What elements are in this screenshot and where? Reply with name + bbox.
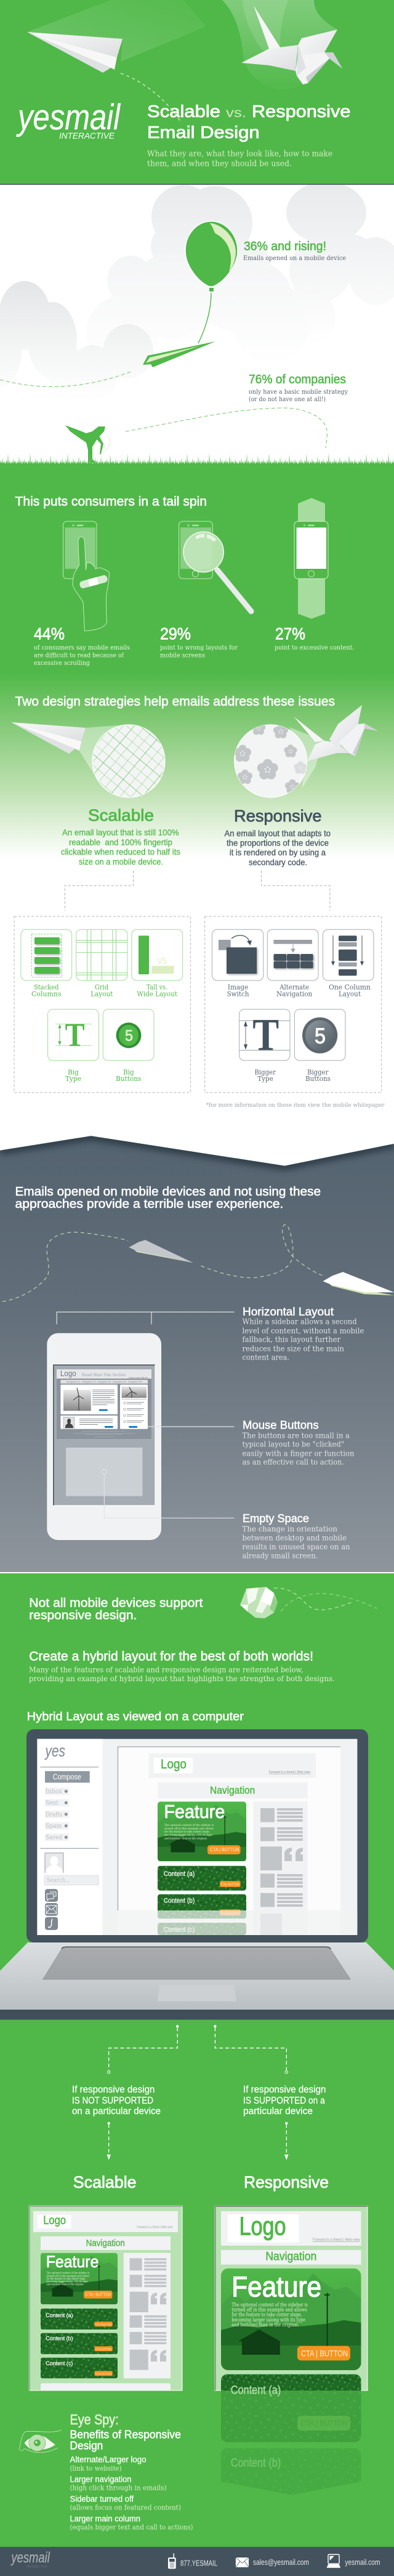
icon: origami crane (241, 6, 342, 84)
responsive header: Logo (239, 2212, 286, 2241)
email header (149, 1753, 316, 1778)
text: supported (243, 2085, 326, 2117)
footnote: *for more information on these item view the mobile whitepaper (206, 1102, 385, 1109)
panel: responsive description: the proportions of the device (227, 838, 329, 848)
stat: 27 percent: point to excessive content. (275, 644, 355, 651)
feature card: Feature (164, 1801, 225, 1822)
content b card: Content (b) (164, 1897, 195, 1904)
tile: grid layout (76, 929, 127, 998)
webmail sidebar (37, 1739, 102, 1935)
desktop email shown on phone: Forward to a friend | Web view (129, 1377, 148, 1379)
webmail sidebar: Inbox (46, 1788, 62, 1795)
panel: scalable description: clickable when reduced to half its (61, 847, 180, 857)
text: not supported: If responsive design (72, 2085, 155, 2095)
dashed flight path (121, 73, 182, 123)
heading: tail spin: This puts consumers in a tail spin (15, 495, 207, 509)
text: not supported: IS NOT SUPPORTED (72, 2095, 153, 2106)
stat: 29 percent: point to wrong layouts for (160, 644, 238, 651)
heading: two design strategies: Two design strategies help emails address these issues (15, 695, 335, 709)
scalable content a: CTA | BUTTON (95, 2323, 111, 2326)
benefit list: Larger main column (70, 2514, 140, 2524)
stat: 76 percent: only have a basic mobile strategy (249, 388, 348, 396)
scalable content a: Content (a) (46, 2312, 73, 2319)
logo: yesmail (16, 97, 121, 137)
panel: responsive description: Responsive (234, 807, 321, 825)
arrow: to responsive (284, 2122, 289, 2160)
responsive feature: becoming larger (along with its type (231, 2317, 305, 2323)
icon: envelope (236, 2558, 249, 2567)
tile: alternate navigation (267, 929, 318, 998)
stat: 44 percent (34, 625, 130, 667)
feature card: becoming larger (along with its type (164, 1833, 212, 1837)
panel: eye spy benefits: Eye Spy: (70, 2411, 119, 2427)
connector: scalable to box (65, 871, 134, 911)
heading: not all devices: Not all mobile devices support (29, 1596, 203, 1610)
content a card: Content (a) (164, 1870, 195, 1878)
tile: stacked columns: Stacked (34, 983, 59, 992)
email navigation (158, 1782, 308, 1798)
tile: alternate navigation: Alternate (279, 983, 309, 992)
icon: phone (168, 2553, 176, 2569)
email sidebar column (253, 1801, 308, 1935)
dashed flight path right (126, 408, 327, 448)
callout: empty space: The change in orientation (243, 1525, 337, 1533)
title: vs. (226, 106, 246, 120)
responsive header (221, 2211, 361, 2246)
tile: grid layout: Layout (90, 990, 113, 998)
icon: phone with long scroll band (294, 498, 328, 619)
title: Email Design (147, 123, 260, 142)
webmail sidebar: Compose (53, 1773, 81, 1782)
feature card: The optional content of the sidebar is (164, 1824, 214, 1827)
panel: responsive description: it is rendered on by using a (230, 847, 326, 857)
tile: bigger type: Bigger (255, 1067, 276, 1076)
panel: footer (0, 2547, 394, 2576)
bandage (79, 574, 108, 589)
stat: 36 percent: 36% and rising! (244, 240, 326, 253)
panel: scalable description (61, 806, 180, 866)
fade at screen bottom (102, 1910, 357, 1935)
tile: big buttons: 5 (125, 1027, 133, 1045)
benefit list: (allows focus on featured content) (70, 2503, 181, 2511)
benefit list: (link to website) (70, 2464, 122, 2472)
heading: hybrid layout (29, 1649, 335, 1683)
benefit list: Larger navigation (70, 2475, 132, 2484)
panel: header band (0, 0, 394, 185)
tile: tall vs wide: Wide Layout (137, 990, 177, 998)
connector: supported (214, 2025, 287, 2073)
icon: paper plane (27, 32, 123, 73)
responsive feature: Feature (231, 2271, 321, 2303)
icon: phone with magnifier (179, 521, 251, 611)
dashed flight path left (0, 372, 131, 386)
heading: terrible experience: Emails opened on mobile devices and not using these (15, 1185, 321, 1199)
scalable navigation: Navigation (86, 2238, 125, 2248)
heading: as viewed on computer: Hybrid Layout as viewed on a computer (27, 1711, 244, 1724)
stat: 76 percent: (or do not have one at all!) (249, 396, 326, 403)
content c card (158, 1923, 246, 1935)
feature card (158, 1801, 246, 1861)
stat: 44 percent: are difficult to read because of (34, 652, 124, 659)
tile: bigger type: T (252, 1010, 279, 1061)
responsive feature: CTA | BUTTON (301, 2348, 348, 2358)
scalable feature: CTA | BUTTON (86, 2292, 111, 2297)
feature card: for the feature to take center stage, (164, 1830, 210, 1834)
tile: big buttons: Big (123, 1067, 134, 1076)
subtitle: them, and when they should be used. (147, 160, 292, 169)
heading: terrible experience (15, 1185, 321, 1211)
dashed flight path looping (2, 1232, 128, 1302)
tile: one column layout (323, 929, 374, 998)
panel: scalable description: Scalable (88, 806, 154, 825)
tile: bigger buttons (294, 1009, 345, 1083)
email header: Logo (161, 1757, 187, 1771)
panel: scalable description: readable and 100% fingertip (69, 838, 172, 847)
footer logo: INTERACTIVE (26, 2566, 47, 2569)
panel: responsive description (224, 807, 331, 867)
scalable feature: and buttons) than in the original. (47, 2283, 84, 2286)
responsive content a (221, 2374, 361, 2442)
stat: 36 percent (243, 240, 346, 262)
callout: mouse buttons: easily with a finger or function (243, 1449, 355, 1457)
figure: person throwing plane (65, 425, 110, 463)
responsive content b (221, 2448, 361, 2495)
responsive content b: Content (b) (231, 2457, 281, 2470)
callout: mouse buttons: Mouse Buttons (243, 1419, 319, 1431)
tile: image switch: Switch (227, 990, 249, 998)
tile: tall vs wide: Tall vs. (147, 983, 167, 992)
illustration: responsive crane and lens (234, 705, 378, 797)
content c card: Content (c) (164, 1926, 195, 1934)
tile: image switch (212, 929, 263, 998)
stat: 44 percent: 44% (34, 625, 65, 643)
panel: green section 2 (0, 463, 394, 858)
webmail sidebar: yes (44, 1742, 65, 1760)
panel: eye spy benefits: Design (70, 2439, 103, 2452)
scalable content b: CTA | BUTTON (95, 2347, 111, 2351)
stat: 76 percent (249, 373, 348, 403)
tile: stacked columns: Columns (31, 990, 62, 998)
clouds (0, 182, 394, 419)
heading: hybrid layout: providing an example of hybrid layout that highlights the strengths of both designs. (29, 1674, 335, 1683)
scalable content c: Content (c) (46, 2360, 73, 2367)
responsive feature: and buttons) than in the original. (231, 2321, 299, 2328)
email navigation: Navigation (210, 1785, 255, 1796)
stat: 29 percent: 29% (160, 625, 191, 643)
stat: 27 percent (275, 625, 355, 651)
tile: bigger type (239, 1009, 290, 1083)
panel: white sky section (0, 184, 394, 465)
tile: one column layout: One Column (329, 983, 371, 992)
tile: tall vs wide (132, 929, 183, 998)
tile: bigger buttons: 5 (315, 1024, 326, 1048)
callout: empty space: already small screen. (243, 1551, 318, 1560)
responsive navigation (221, 2250, 361, 2265)
icon: laptop (327, 2554, 340, 2568)
responsive content a: Content (a) (231, 2384, 281, 2397)
desktop email shown on phone: Navigation #1 Navigation #2 Navigation #3 Navigation #4 Navigation #5 (66, 1380, 142, 1383)
tile: bigger type: Type (257, 1074, 273, 1083)
responsive feature (221, 2268, 361, 2370)
callout: mouse buttons (243, 1419, 355, 1467)
scalable sidebar (124, 2253, 171, 2378)
scalable feature: turned off in this example and allows (47, 2275, 89, 2278)
tile: image switch: Image (228, 983, 248, 992)
scalable feature (41, 2252, 118, 2304)
device: laptop (0, 1729, 394, 2020)
scalable content a (41, 2309, 118, 2329)
subtitle: What they are, what they look like, how to make (147, 149, 332, 158)
connector: not supported (107, 2025, 179, 2073)
connector: responsive to box (261, 871, 330, 911)
text: not supported (72, 2085, 161, 2117)
dashed trail from paper ball (274, 1588, 377, 1612)
content a card (158, 1866, 246, 1891)
callout: horizontal layout: level of content, without a mobile (243, 1326, 364, 1335)
scalable feature: for the feature to take center stage, (47, 2278, 86, 2281)
scalable feature: becoming larger (along with its type (47, 2280, 88, 2283)
text: supported: IS SUPPORTED on a (243, 2095, 325, 2106)
icon: grey plane (129, 1240, 193, 1263)
benefit list: (high click through in emails) (70, 2484, 167, 2492)
desktop email shown on phone: Email Main Title Section (82, 1372, 126, 1377)
scalable content c: CTA | BUTTON (95, 2372, 111, 2376)
footer logo: yesmail (10, 2550, 50, 2566)
title (147, 102, 350, 142)
text: not supported: on a particular device (72, 2106, 161, 2117)
callout: empty space: Empty Space (243, 1512, 309, 1525)
stat: 44 percent: excessive scrolling (34, 659, 90, 667)
contact: email: sales@yesmail.com (253, 2558, 309, 2567)
tile: big type: Big (68, 1067, 79, 1076)
heading: not all devices (29, 1596, 203, 1623)
callout: horizontal layout: While a sidebar allows a second (243, 1318, 357, 1326)
subtitle (147, 149, 332, 169)
heading: responsive: Responsive (244, 2173, 329, 2191)
scalable feature: The optional content of the sidebar is (47, 2272, 90, 2275)
responsive content a: CTA | BUTTON (301, 2418, 348, 2428)
email on desktop (102, 1747, 357, 1935)
webmail sidebar: Drafts (46, 1811, 62, 1818)
scalable navigation (41, 2236, 171, 2250)
callout: empty space: results in unused space on an (243, 1543, 350, 1551)
title: Responsive (252, 102, 350, 121)
plane trail (27, 0, 206, 62)
icon: crumpled paper ball (240, 1587, 278, 1618)
callout lines (57, 1312, 234, 1518)
footer logo (10, 2550, 50, 2569)
callout: horizontal layout: reduces the size of the main (243, 1344, 344, 1353)
tile: big type: T (65, 1016, 85, 1053)
feature card: and buttons) than in the original. (164, 1836, 207, 1840)
feature card: CTA | BUTTON (210, 1846, 239, 1853)
scalable header: Forward to a friend | Web view (137, 2226, 173, 2230)
contact: website: yesmail.com (345, 2558, 380, 2567)
feature card: turned off in this example and allows (164, 1827, 214, 1830)
contact: phone number: 877.YESMAIL (180, 2559, 217, 2567)
stat: 27 percent: 27% (275, 625, 305, 643)
content a card: CTA | BUTTON (221, 1883, 239, 1887)
panel: scalable description: size on a mobile device. (79, 857, 163, 866)
benefit list: (equals bigger text and call to actions) (70, 2523, 193, 2531)
panel: eye spy benefits: Benefits of Responsive (70, 2429, 181, 2441)
stat: 36 percent: Emails opened on a mobile device (243, 255, 346, 262)
text: supported: If responsive design (243, 2085, 326, 2095)
tile: big type: Type (65, 1074, 81, 1083)
panel: dark section (0, 1136, 394, 2576)
icon: eye (19, 2430, 62, 2453)
title: Scalable (147, 102, 220, 121)
callout: horizontal layout: fallback, this layout further (243, 1335, 340, 1344)
empty space box (66, 1448, 142, 1496)
stat: 29 percent: mobile screens (160, 652, 205, 659)
webmail sidebar: Sent (46, 1800, 58, 1807)
panel: scalable description: An email layout that is still 100% (62, 828, 179, 838)
grass (0, 450, 394, 463)
panel: scalable techniques (14, 916, 190, 1093)
desktop email shown on phone: Logo (60, 1369, 76, 1378)
laptop base (0, 1942, 394, 2020)
callout: horizontal layout: content area. (243, 1353, 289, 1362)
crane trail (222, 0, 337, 89)
tile: big buttons (103, 1009, 154, 1083)
panel: scalable email mockup (29, 2206, 182, 2391)
scalable content b: Content (b) (46, 2335, 73, 2342)
tile: one column layout: Layout (339, 990, 361, 998)
webmail sidebar: Search... (47, 1877, 70, 1884)
responsive header: Forward to a friend | Web view (313, 2238, 360, 2242)
scalable content c (41, 2358, 118, 2378)
logo: INTERACTIVE (59, 131, 115, 141)
panel: responsive email mockup (215, 2206, 368, 2495)
stat: 29 percent (160, 625, 238, 659)
webmail sidebar: Spam (46, 1822, 62, 1830)
tile: alternate navigation: Navigation (276, 990, 313, 998)
heading: hybrid layout: Create a hybrid layout for the best of both worlds! (29, 1649, 313, 1663)
benefit list: Alternate/Larger logo (70, 2455, 147, 2464)
callout: empty space (243, 1512, 350, 1560)
tile: big type (48, 1009, 98, 1083)
illustration: scalable plane and lens (11, 722, 165, 797)
scalable header: Logo (43, 2214, 66, 2227)
desktop email shown on phone (57, 1369, 151, 1439)
callout: mouse buttons: The buttons are too small in a (243, 1431, 350, 1440)
heading: scalable: Scalable (73, 2173, 137, 2191)
panel: responsive description: An email layout that adapts to (224, 828, 331, 838)
arrow: to scalable (107, 2122, 111, 2160)
icon: phone with injured finger (63, 521, 110, 631)
scalable content b (41, 2333, 118, 2354)
callout: horizontal layout (243, 1305, 364, 1362)
responsive feature: for the feature to take center stage, (231, 2312, 302, 2318)
heading: not all devices: responsive design. (29, 1609, 137, 1623)
scalable feature: Feature (46, 2252, 98, 2271)
callout: mouse buttons: as an effective call to action. (243, 1458, 344, 1467)
text: supported: particular device (243, 2106, 313, 2117)
tile: bigger buttons: Bigger (307, 1067, 329, 1076)
tile: stacked columns (21, 929, 72, 998)
webmail sidebar: Saved (46, 1834, 62, 1841)
panel: responsive techniques (205, 916, 382, 1093)
responsive navigation: Navigation (265, 2251, 316, 2264)
icon: white plane (323, 1272, 394, 1295)
device: phone mockup (47, 1333, 161, 1540)
callout: mouse buttons: typical layout to be "clicked" (243, 1440, 344, 1449)
heading: hybrid layout: Many of the features of scalable and responsive design are reiterated below, (29, 1665, 304, 1674)
benefit list: Sidebar turned off (70, 2495, 134, 2504)
tile: bigger buttons: Buttons (305, 1074, 331, 1083)
responsive feature: turned off in this example and allows (231, 2307, 307, 2313)
tile: grid layout: Grid (95, 983, 109, 992)
icon: balloon (185, 221, 238, 343)
tile: tall vs wide: VS (158, 956, 167, 966)
content b card (158, 1894, 246, 1918)
responsive feature: The optional content of the sidebar is (231, 2302, 308, 2308)
callout: empty space: between desktop and mobile (243, 1533, 347, 1542)
tile: big buttons: Buttons (116, 1074, 141, 1083)
stat: 76 percent: 76% of companies (249, 373, 346, 386)
stat: 44 percent: of consumers say mobile emails (34, 644, 130, 651)
panel: responsive description: secondary code. (249, 857, 307, 867)
scalable header (33, 2211, 178, 2232)
icon: green paper plane (143, 341, 215, 367)
panel: eye spy benefits (19, 2411, 193, 2531)
benefit list (70, 2455, 193, 2531)
heading: terrible experience: approaches provide a terrible user experience. (15, 1197, 283, 1211)
scalable bottom bar (41, 2383, 171, 2391)
callout: horizontal layout: Horizontal Layout (243, 1305, 334, 1318)
panel: lower green section (0, 1573, 394, 2547)
email header: Forward to a friend | Web view (269, 1771, 310, 1774)
